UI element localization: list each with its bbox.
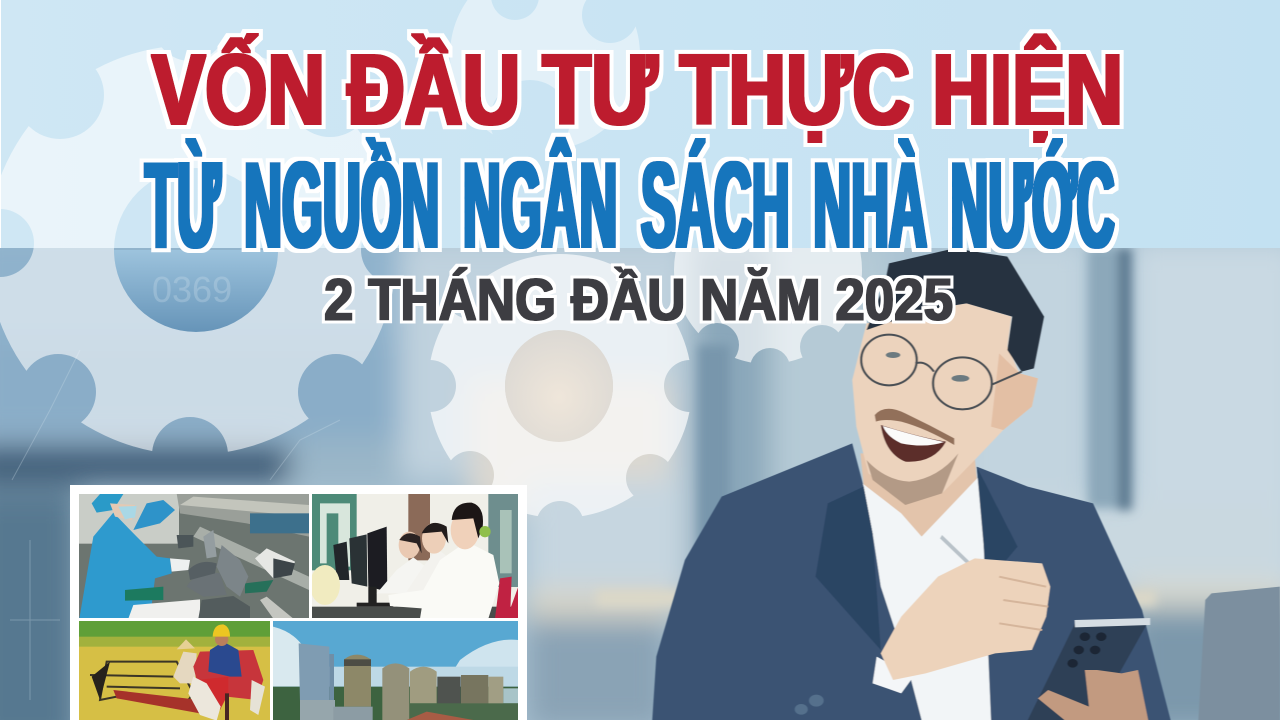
moustache <box>875 409 954 445</box>
decorative gears <box>0 0 862 516</box>
photo: rice harvest with combine <box>79 621 271 720</box>
photo: factory assembly line workers <box>79 494 309 619</box>
hand under phone <box>1038 670 1148 720</box>
laptop <box>1198 587 1280 720</box>
open mouth smile <box>881 425 946 462</box>
title: line 2 blue: TỪ NGUỒN NGÂN SÁCH NHÀ NƯỚC <box>145 135 1115 273</box>
face <box>852 303 1038 500</box>
white shirt <box>862 477 999 720</box>
blazer lapels <box>816 467 1018 650</box>
smartphone top edge <box>1075 618 1150 627</box>
pen <box>940 535 977 568</box>
smartphone <box>1028 618 1150 720</box>
gear: behind man <box>674 248 862 362</box>
chart lines over dark strip <box>10 350 340 700</box>
finger creases <box>999 577 1048 630</box>
gear 1 hole tint <box>114 250 278 332</box>
blazer buttons <box>795 695 824 715</box>
subtitle: period: 2 THÁNG ĐẦU NĂM 2025 <box>324 267 953 333</box>
man with phone <box>652 248 1280 720</box>
panel: photo collage frame <box>70 485 527 720</box>
hair <box>867 248 1044 372</box>
neck <box>860 453 979 537</box>
gear: top centre <box>450 0 640 146</box>
photo: city buildings <box>273 621 518 720</box>
eyes <box>886 352 969 382</box>
glasses <box>861 335 1022 409</box>
cheek shade <box>991 353 1038 430</box>
gear: large left <box>0 48 394 452</box>
navy blazer <box>652 443 1171 720</box>
photo: call centre operators <box>310 494 518 619</box>
gear centre warm hub glow <box>505 330 613 442</box>
background: light blue sky band <box>1 0 1280 248</box>
background: blurred office photo <box>0 230 1280 720</box>
shirt cuff <box>873 657 913 693</box>
hole digital number: 0369 <box>152 269 232 310</box>
fist holding pen <box>881 558 1050 680</box>
phone cameras <box>1067 632 1107 668</box>
gear: centre <box>430 254 690 516</box>
stubble beard <box>867 453 958 505</box>
